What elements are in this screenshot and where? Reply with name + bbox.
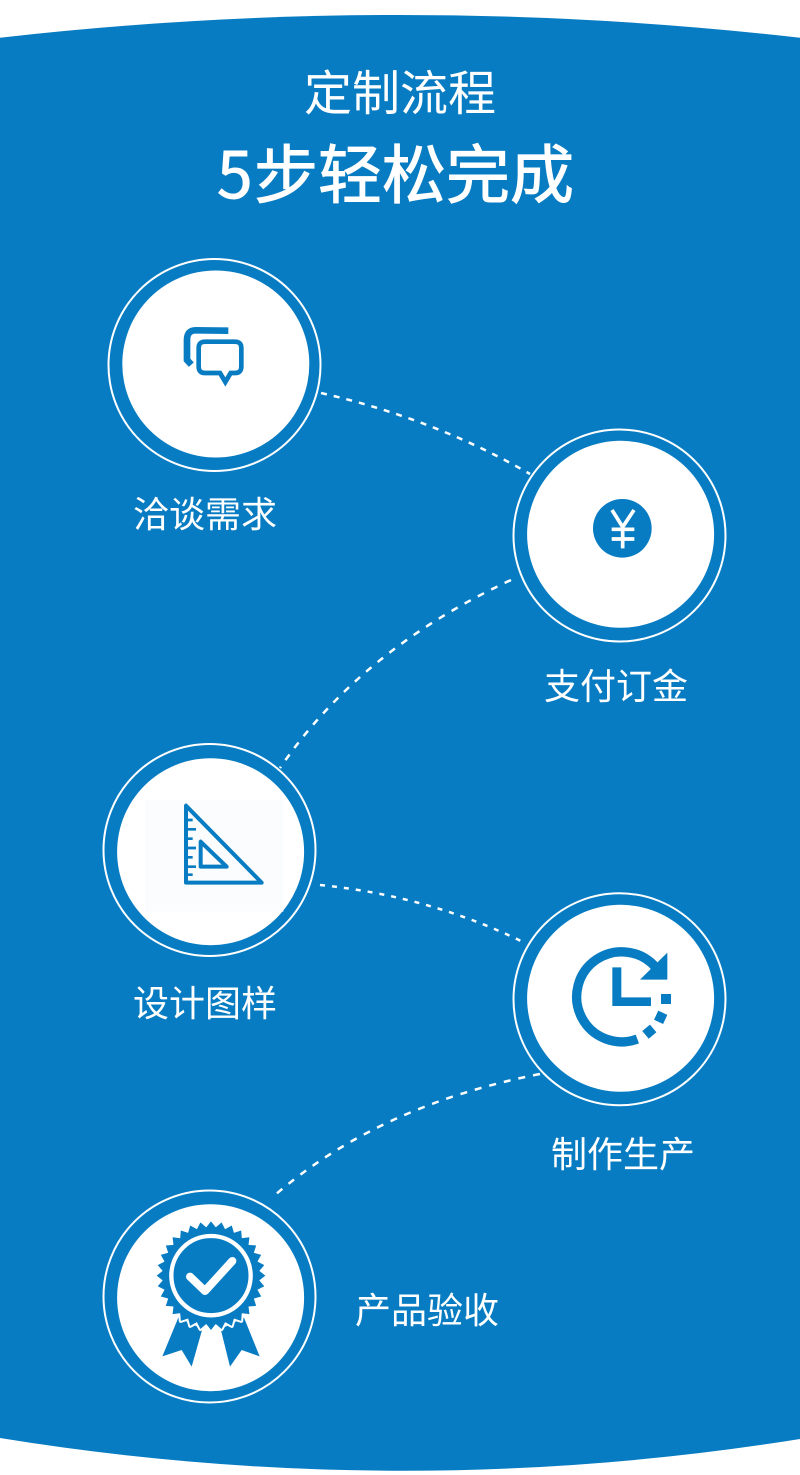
step 4: production — [514, 893, 726, 1178]
arrow: dashed path step 2 to 3 — [280, 580, 511, 768]
heading: five easy steps: 5 — [217, 125, 253, 217]
circle: step 2 outer ring — [514, 430, 726, 642]
circle: step 1 white disc — [122, 270, 309, 458]
label: discuss requirements: 洽谈需求 — [133, 486, 277, 538]
circle: step 5 white disc — [117, 1204, 304, 1391]
icon: yen coin — [593, 499, 652, 558]
heading: five easy steps: 步轻松完成 — [254, 125, 574, 217]
circle: step 4 outer ring — [514, 893, 726, 1105]
step 3: design drawings — [104, 744, 316, 1027]
icon: rosette with check mark — [157, 1221, 265, 1367]
circle: step 2 white disc — [527, 441, 714, 628]
icon: set square — [145, 800, 283, 912]
circle: step 4 white disc — [527, 905, 714, 1092]
icon: clock with arrow — [577, 952, 671, 1042]
arrow: dashed path step 3 to 4 — [320, 885, 525, 943]
arrow: dashed path step 1 to 2 — [321, 393, 530, 474]
circle: step 5 outer ring — [104, 1190, 316, 1402]
icon: chat bubbles — [187, 330, 241, 382]
title: process: 定制流程 — [304, 54, 496, 124]
circle: step 1 outer ring — [108, 259, 320, 471]
circle: step 3 outer ring — [104, 744, 316, 956]
label: pay deposit: 支付订金 — [544, 658, 688, 710]
label: design drawings: 设计图样 — [133, 975, 277, 1027]
step 1: discuss requirements — [108, 259, 320, 538]
step 5: acceptance — [104, 1190, 499, 1402]
circle: step 3 white disc — [117, 758, 304, 945]
step 2: pay deposit — [514, 430, 726, 710]
arrow: dashed path step 4 to 5 — [275, 1074, 540, 1195]
label: acceptance: 产品验收 — [355, 1282, 499, 1334]
label: production: 制作生产 — [551, 1126, 695, 1178]
